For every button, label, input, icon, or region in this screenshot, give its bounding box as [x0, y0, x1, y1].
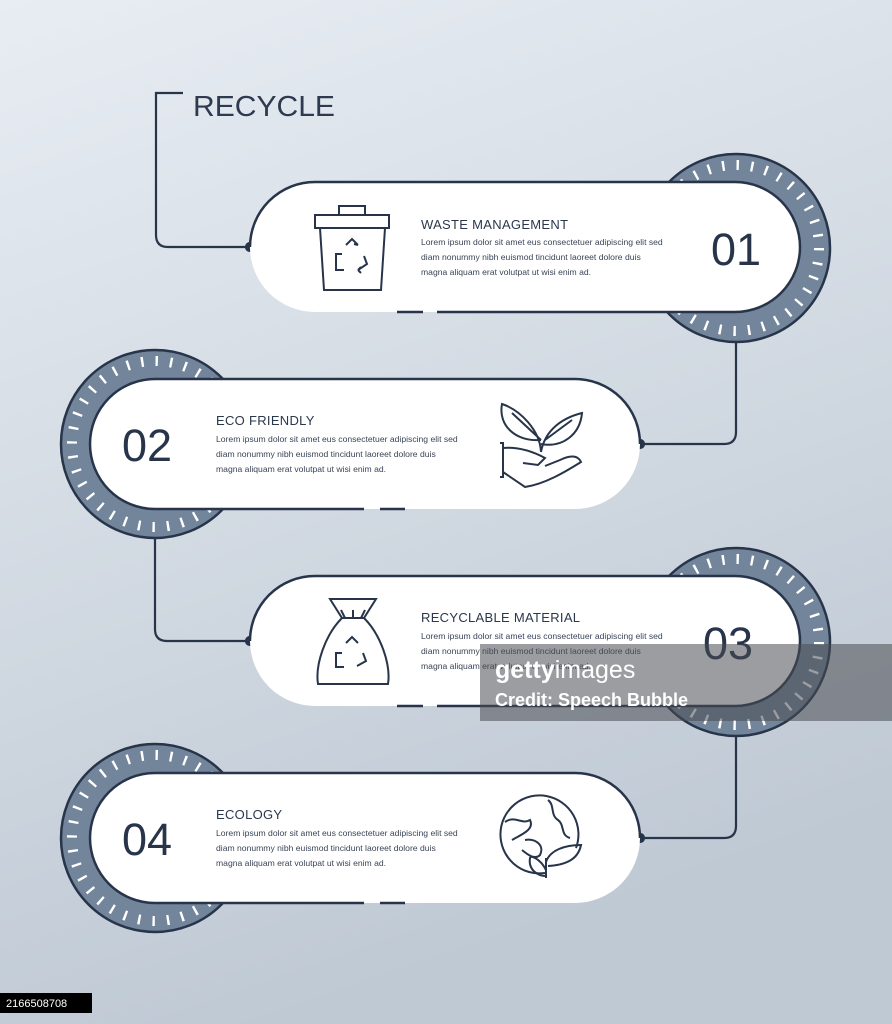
- text: ecology: [216, 807, 458, 868]
- connector: step 1 to step 2: [636, 343, 736, 448]
- connector: title to step 1: [156, 93, 254, 251]
- title: RECYCLE: [193, 91, 335, 123]
- panel: step 1 waste management: [250, 154, 830, 342]
- text: waste management: diam nonummy nibh euismod tincidunt laoreet dolore duis: [421, 252, 641, 262]
- ring 1: [642, 154, 830, 342]
- text: ecology: ECOLOGY: [216, 807, 282, 822]
- panel: step 2 eco friendly: [61, 350, 640, 538]
- panel: step 4 ecology: [61, 744, 640, 932]
- number 01: 01: [711, 224, 761, 275]
- text: eco friendly: diam nonummy nibh euismod tincidunt laoreet dolore duis: [216, 449, 436, 459]
- text: ecology: Lorem ipsum dolor sit amet eus consectetuer adipiscing elit sed: [216, 828, 458, 838]
- text: recyclable material: [421, 610, 663, 671]
- text: waste management: Lorem ipsum dolor sit amet eus consectetuer adipiscing elit sed: [421, 237, 663, 247]
- connector: step 2 to step 3: [155, 539, 254, 645]
- watermark: Credit: Speech Bubble: [495, 690, 688, 710]
- text: recyclable material: Lorem ipsum dolor sit amet eus consectetuer adipiscing elit sed: [421, 631, 663, 641]
- ring 3: [642, 548, 830, 736]
- ring 2: [61, 350, 249, 538]
- number 04: 04: [122, 814, 172, 865]
- number 02: 02: [122, 420, 172, 471]
- text: eco friendly: Lorem ipsum dolor sit amet eus consectetuer adipiscing elit sed: [216, 434, 458, 444]
- icon: trash bin: [315, 206, 389, 290]
- connector: step 3 to step 4: [636, 737, 736, 842]
- ring 4: [61, 744, 249, 932]
- text: waste management: magna aliquam erat volutpat ut wisi enim ad.: [421, 267, 591, 277]
- icon: globe with leaves: [500, 795, 581, 878]
- text: eco friendly: magna aliquam erat volutpat ut wisi enim ad.: [216, 464, 386, 474]
- text: waste management: [421, 217, 663, 277]
- image id label: 2166508708: [6, 998, 67, 1010]
- icon: plant in hand: [500, 404, 582, 487]
- watermark: [480, 644, 892, 721]
- text: ecology: diam nonummy nibh euismod tincidunt laoreet dolore duis: [216, 843, 436, 853]
- watermark: gettyimages: [495, 656, 635, 684]
- text: waste management: WASTE MANAGEMENT: [421, 217, 568, 232]
- text: eco friendly: ECO FRIENDLY: [216, 413, 315, 428]
- text: recyclable material: magna aliquam erat volutpat ut wisi enim ad.: [421, 661, 591, 671]
- panel: step 3 recyclable material: [250, 548, 830, 736]
- text: eco friendly: [216, 413, 458, 474]
- text: recyclable material: diam nonummy nibh euismod tincidunt laoreet dolore duis: [421, 646, 641, 656]
- text: ecology: magna aliquam erat volutpat ut wisi enim ad.: [216, 858, 386, 868]
- number 03: 03: [703, 618, 753, 669]
- image id label: [0, 993, 92, 1013]
- icon: recycling bag: [317, 599, 389, 684]
- text: recyclable material: RECYCLABLE MATERIAL: [421, 610, 580, 625]
